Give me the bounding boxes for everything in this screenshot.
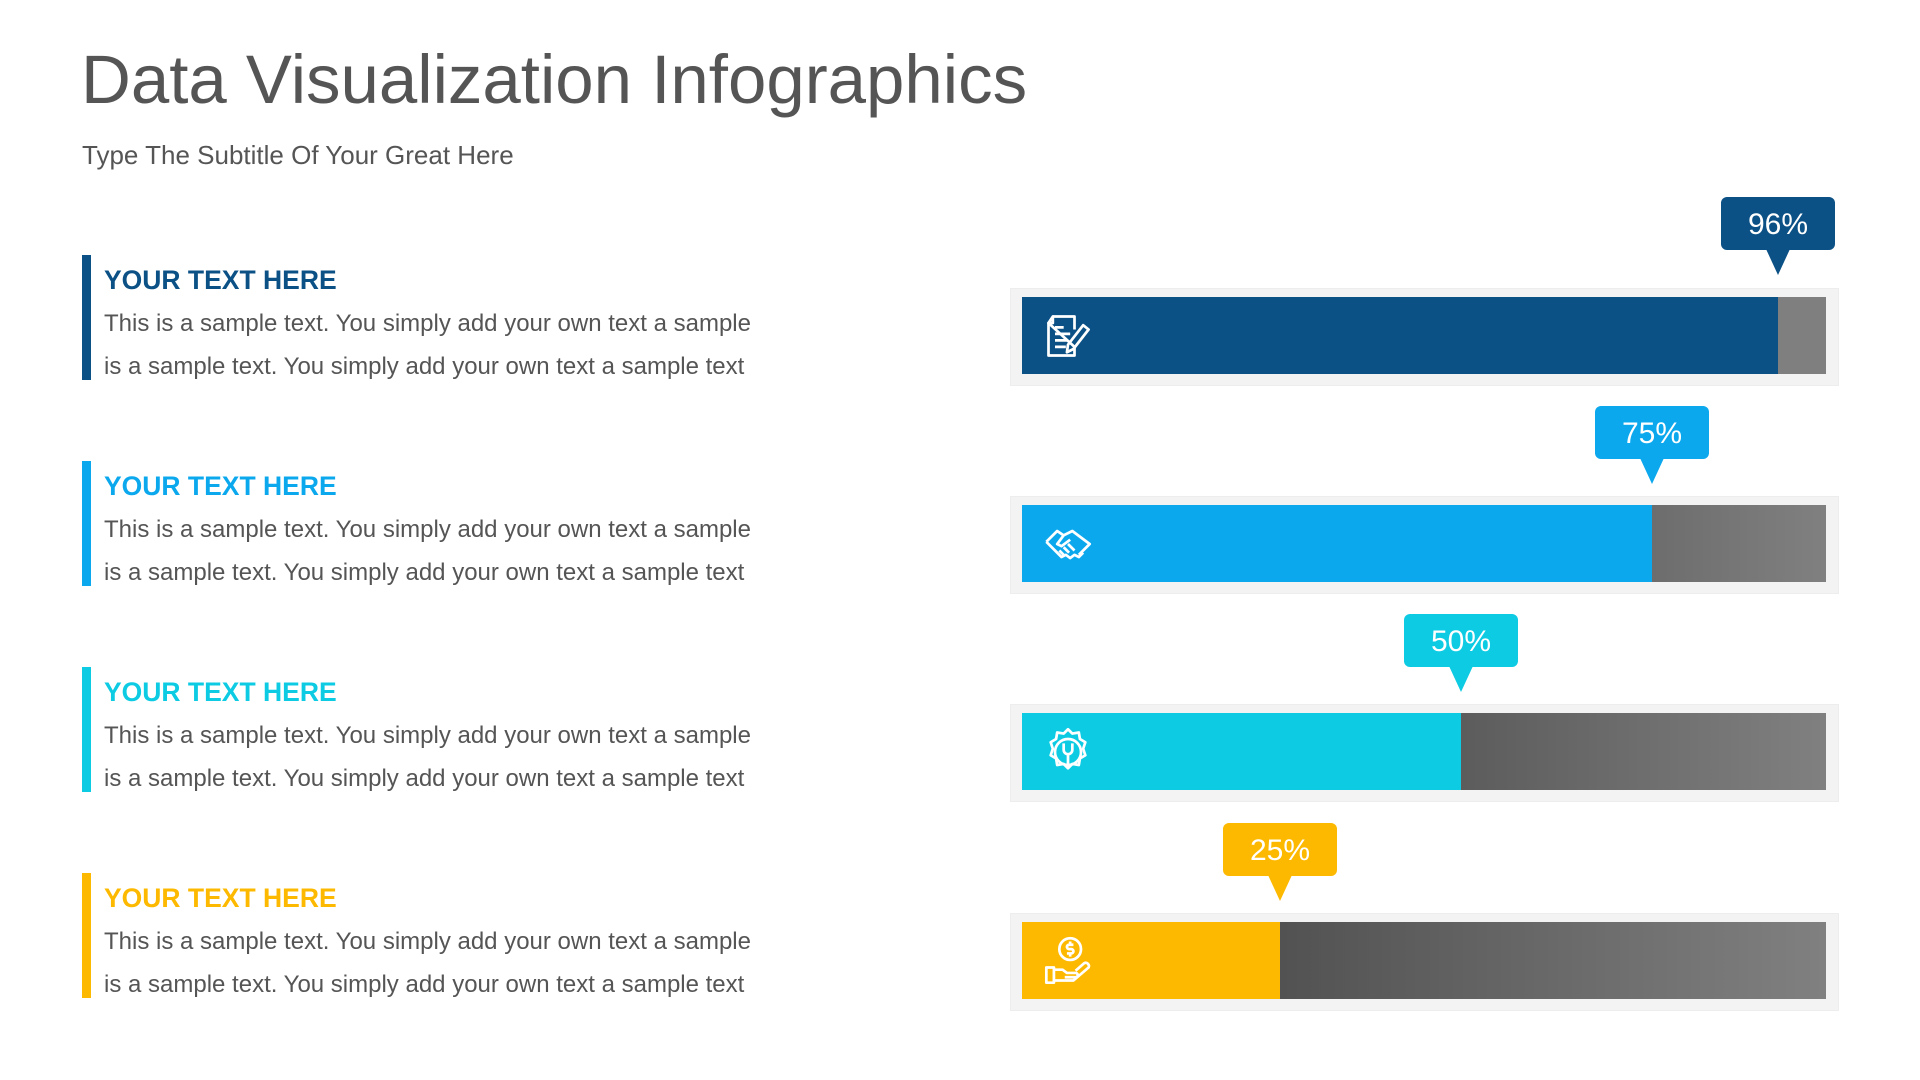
text block 1: is a sample text. You simply add your own text a sample text [104,353,744,380]
callout 75%: 75% [1622,417,1682,450]
text block 2: This is a sample text. You simply add your own text a sample [104,516,751,543]
subtitle: Type The Subtitle Of Your Great Here [82,140,514,170]
text block 1: YOUR TEXT HERE [104,265,337,295]
icon: document pen [1047,315,1090,357]
text block 4: is a sample text. You simply add your own text a sample text [104,971,744,998]
icon: gear wrench [1049,728,1087,770]
callout 96%: 96% [1748,208,1808,241]
callout 25% [1223,823,1337,876]
text block 3: YOUR TEXT HERE [104,677,337,707]
callout 25%: 25% [1250,834,1310,867]
callout 75% [1595,406,1709,459]
callout 96% [1721,197,1835,250]
text block 2 [82,461,751,586]
bar 2 [1010,496,1839,594]
text block 2: is a sample text. You simply add your own text a sample text [104,559,744,586]
text block 3 [82,667,751,792]
icon: handshake [1045,530,1092,560]
callout 50%: 50% [1431,625,1491,658]
text block 3: This is a sample text. You simply add your own text a sample [104,722,751,749]
bar 1 [1010,288,1839,386]
title: Data Visualization Infographics [81,41,1027,118]
bar 4 [1010,913,1839,1011]
text block 1: This is a sample text. You simply add your own text a sample [104,310,751,337]
callout 50% [1404,614,1518,667]
text block 4: This is a sample text. You simply add your own text a sample [104,928,751,955]
bar 3 [1010,704,1839,802]
text block 2: YOUR TEXT HERE [104,471,337,501]
text block 3: is a sample text. You simply add your own text a sample text [104,765,744,792]
text block 4 [82,873,751,998]
text block 4: YOUR TEXT HERE [104,883,337,913]
icon: hand coin [1044,936,1090,984]
text block 1 [82,255,751,380]
